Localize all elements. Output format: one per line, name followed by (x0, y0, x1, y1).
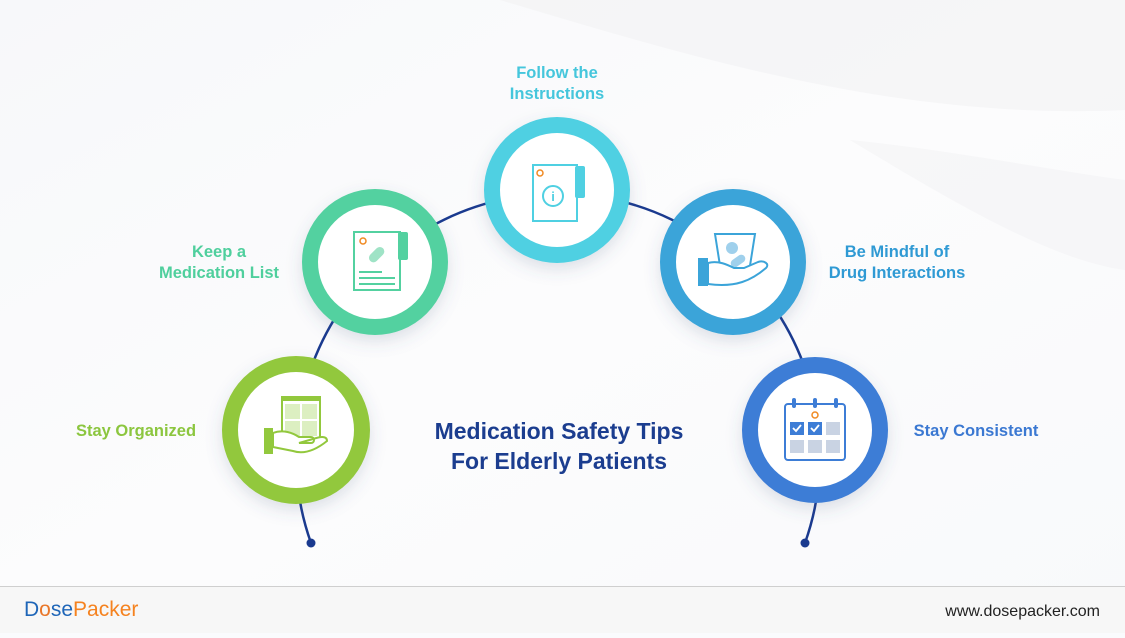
footer (0, 586, 1125, 633)
title: Medication Safety Tips (435, 418, 683, 444)
label: stay organized: Stay Organized (76, 422, 196, 440)
label: drug interactions: Drug Interactions (829, 264, 965, 282)
label: follow the instructions: Follow the (516, 64, 598, 82)
circle: stay consistent (750, 365, 880, 495)
label: follow the instructions: Instructions (510, 85, 604, 103)
logo: DosePacker (24, 598, 138, 621)
circle: follow instructions: i (551, 189, 555, 204)
label: drug interactions: Be Mindful of (845, 243, 950, 261)
circle: follow instructions (492, 125, 622, 255)
label: keep a medication list: Medication List (159, 264, 280, 282)
label: stay consistent: Stay Consistent (914, 422, 1039, 440)
connecting arc (296, 194, 820, 548)
circle: stay organized (230, 364, 362, 496)
website: www.dosepacker.com (944, 603, 1100, 620)
title: For Elderly Patients (451, 448, 667, 474)
circle: medication list (310, 197, 440, 327)
label: keep a medication list: Keep a (192, 243, 247, 261)
circle: drug interactions (668, 197, 798, 327)
